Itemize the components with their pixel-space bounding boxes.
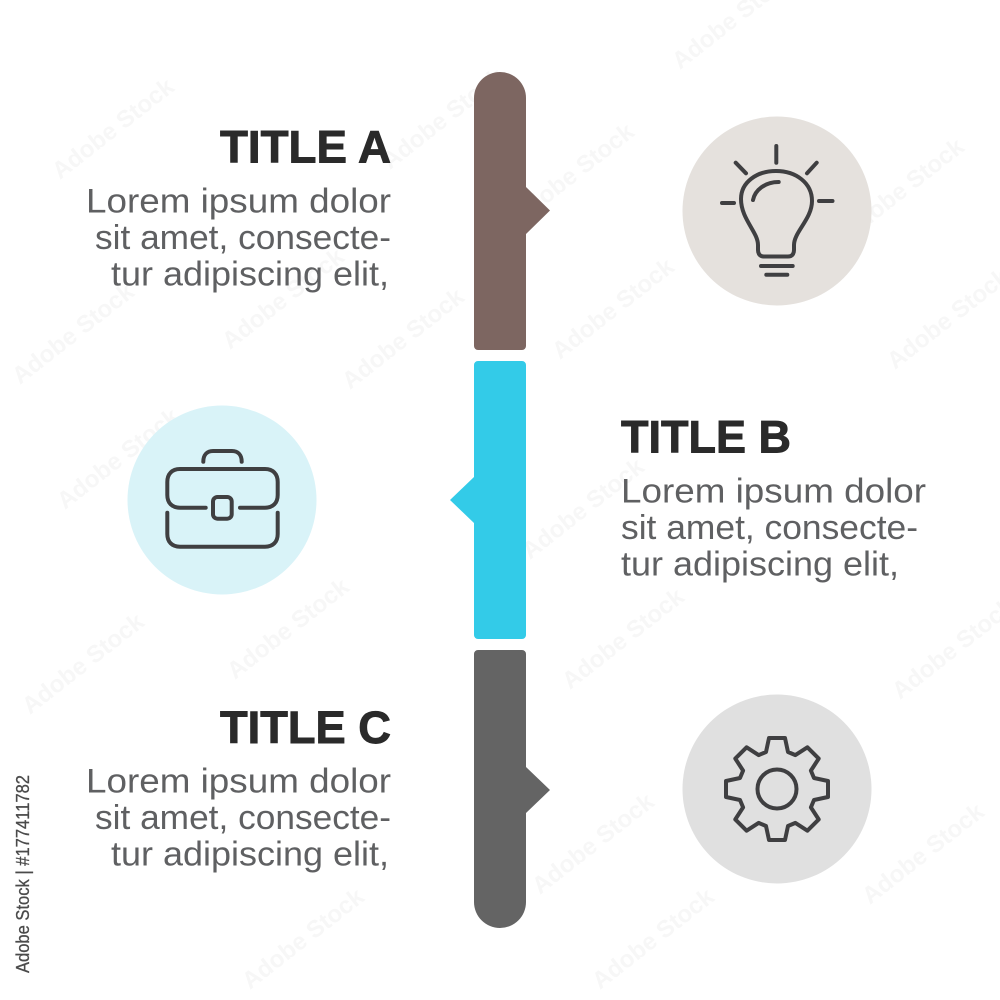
- heading: title C: TITLE C: [220, 702, 391, 753]
- background watermark pattern: Adobe Stock: [377, 63, 510, 175]
- body text A: sit amet, consecte-: [95, 219, 391, 257]
- background watermark pattern: Adobe Stock: [547, 253, 680, 365]
- body text C: sit amet, consecte-: [95, 799, 391, 837]
- background watermark pattern: Adobe Stock: [47, 73, 180, 185]
- segment A: brown bar with right pointer: [474, 72, 550, 350]
- icon: briefcase in pale blue circle: [128, 406, 316, 594]
- background watermark pattern: Adobe Stock: [17, 608, 150, 720]
- background watermark pattern: Adobe Stock: [837, 133, 970, 245]
- background watermark pattern: Adobe Stock: [7, 278, 140, 390]
- body text A: tur adipiscing elit,: [111, 256, 389, 294]
- stock image credit, vertical: Adobe Stock | #177411782: [13, 775, 33, 973]
- heading: title A: TITLE A: [220, 122, 391, 172]
- background watermark pattern: Adobe Stock: [337, 283, 470, 395]
- body text B: tur adipiscing elit,: [621, 546, 899, 584]
- block A text: [86, 122, 391, 294]
- body text B: Lorem ipsum dolor: [621, 472, 926, 510]
- block B text: [621, 412, 926, 584]
- background watermark pattern: Adobe Stock: [527, 788, 660, 900]
- background watermark pattern: Adobe Stock: [857, 798, 990, 910]
- background watermark pattern: Adobe Stock: [587, 883, 720, 995]
- background watermark pattern: Adobe Stock: [217, 243, 350, 355]
- segment C: grey bar with right pointer: [474, 650, 550, 928]
- heading: title B: TITLE B: [621, 412, 791, 462]
- body text C: Lorem ipsum dolor: [86, 762, 391, 800]
- segment B: cyan bar with left pointer: [450, 361, 526, 639]
- body text B: sit amet, consecte-: [621, 509, 918, 547]
- body text A: Lorem ipsum dolor: [86, 182, 391, 220]
- body text C: tur adipiscing elit,: [111, 836, 389, 874]
- background watermark pattern: Adobe Stock: [222, 573, 355, 685]
- body text C: [86, 762, 391, 874]
- icon: gear in grey circle: [682, 694, 872, 884]
- background watermark pattern: Adobe Stock: [237, 883, 370, 995]
- block C text: [86, 702, 391, 874]
- background watermark pattern: Adobe Stock: [517, 453, 650, 565]
- icon: light bulb in beige circle: [682, 116, 872, 306]
- background watermark pattern: Adobe Stock: [52, 403, 185, 515]
- body text A: [86, 182, 391, 294]
- body text B: [621, 472, 926, 584]
- background watermark pattern: Adobe Stock: [507, 118, 640, 230]
- background watermark pattern: Adobe Stock: [557, 583, 690, 695]
